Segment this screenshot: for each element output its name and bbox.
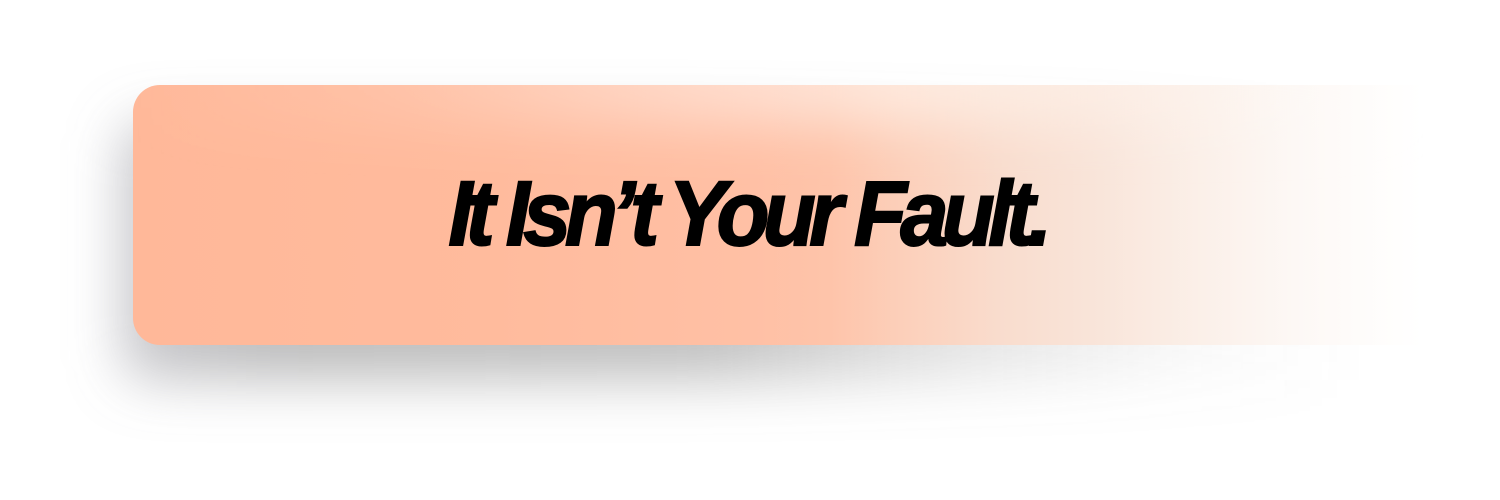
lighter glow along top edge	[332, 85, 1122, 147]
title: It Isn’t Your Fault.	[448, 163, 1046, 265]
panel: gradient banner	[133, 85, 1423, 345]
